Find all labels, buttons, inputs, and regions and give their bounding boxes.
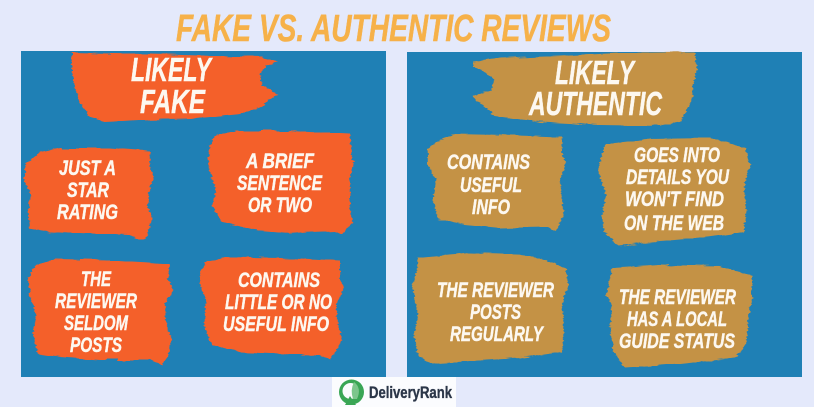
title: FAKE VS. AUTHENTIC REVIEWS [176, 8, 611, 50]
card: the reviewer seldom posts [28, 259, 173, 365]
card: contains little or no useful info [200, 257, 344, 360]
card: contains useful info: CONTAINS [447, 151, 530, 174]
logo: DeliveryRank: DeliveryRank [369, 384, 453, 402]
card: just a star rating [24, 148, 154, 240]
card: the reviewer posts regularly [412, 253, 568, 364]
card: contains useful info [428, 134, 566, 231]
card: the reviewer seldom posts: REVIEWER [55, 290, 138, 313]
card: the reviewer has a local guide status [606, 265, 752, 368]
card: a brief sentence or two: SENTENCE [237, 172, 323, 195]
card: the reviewer posts regularly: THE REVIEWER [437, 279, 555, 302]
header: likely authentic: LIKELY [555, 54, 636, 91]
card: the reviewer has a local guide status: GUIDE STATUS [619, 330, 735, 353]
header: likely fake: LIKELY [131, 51, 213, 88]
panel: likely fake [21, 51, 386, 377]
card: goes into details: ON THE WEB [624, 212, 724, 235]
card: contains useful info: USEFUL [460, 174, 522, 197]
card: goes into details [598, 138, 750, 246]
card: goes into details: WON'T FIND [625, 188, 724, 211]
card: a brief sentence or two: A BRIEF [245, 150, 315, 173]
header: likely fake [72, 51, 278, 122]
panel: likely authentic [407, 52, 802, 377]
header: likely authentic: AUTHENTIC [528, 85, 663, 122]
card: just a star rating: JUST A [59, 157, 116, 180]
card: contains useful info: INFO [472, 196, 510, 219]
card: contains little or no useful info: CONTAINS [238, 269, 320, 292]
card: the reviewer has a local guide status: HAS A LOCAL [627, 308, 727, 331]
card: goes into details: GOES INTO [634, 144, 720, 167]
header: likely authentic [472, 52, 697, 126]
card: the reviewer posts regularly: REGULARLY [450, 323, 544, 346]
card: a brief sentence or two: OR TWO [248, 194, 312, 217]
card: a brief sentence or two [208, 131, 354, 235]
header: likely fake: FAKE [140, 83, 206, 120]
card: the reviewer seldom posts: SELDOM [64, 312, 128, 335]
card: goes into details: DETAILS YOU [626, 166, 730, 189]
card: the reviewer seldom posts: POSTS [70, 334, 122, 357]
card: the reviewer has a local guide status: THE REVIEWER [619, 286, 737, 309]
icon: green fork and leaf [339, 380, 364, 405]
card: the reviewer seldom posts: THE [81, 268, 112, 291]
card: contains little or no useful info: USEFUL INFO [223, 313, 329, 336]
logo: DeliveryRank [332, 377, 456, 407]
card: contains little or no useful info: LITTLE OR NO [225, 291, 332, 314]
card: the reviewer posts regularly: POSTS [470, 301, 521, 324]
card: just a star rating: STAR [67, 179, 110, 202]
card: just a star rating: RATING [57, 201, 118, 224]
